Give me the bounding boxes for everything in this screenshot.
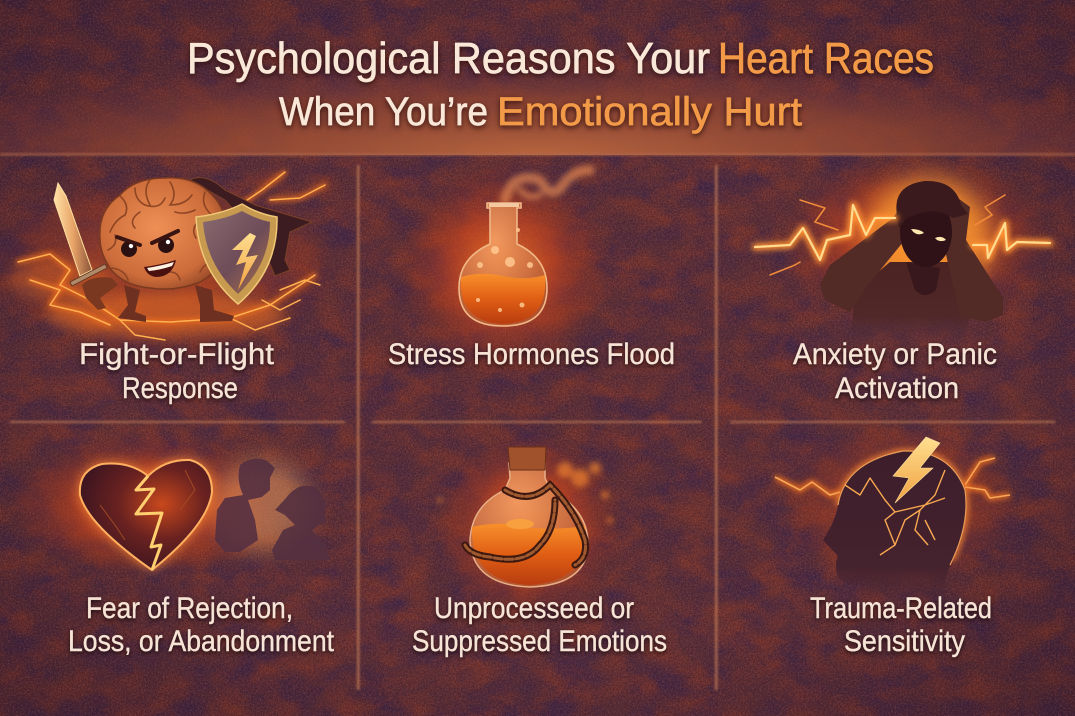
label: Unprocesseed or (434, 592, 634, 625)
lightning around brain (18, 172, 325, 340)
label: Sensitivity (844, 625, 965, 658)
label: Stress Hormones Flood (388, 338, 675, 371)
icon: sword (54, 183, 118, 310)
icon: head silhouette (823, 451, 966, 600)
icon: flask (459, 203, 547, 326)
icon: lightning bolt (893, 437, 940, 503)
icon: shield (196, 204, 277, 304)
label: Trauma-Related (810, 592, 992, 625)
label: Fight-or-Flight (79, 338, 275, 371)
icon: couple silhouette (215, 459, 330, 560)
panel: unprocessed emotions (360, 424, 715, 694)
label: Anxiety or Panic (793, 338, 997, 371)
title: Psychological Reasons Your (187, 34, 710, 83)
title: Emotionally Hurt (497, 90, 802, 134)
icon: person silhouette (820, 181, 1003, 345)
panel: fear of rejection (0, 424, 357, 694)
panel: trauma sensitivity (718, 424, 1075, 694)
title: Heart Races (718, 34, 934, 83)
icon: broken heart (80, 460, 212, 570)
label (412, 592, 667, 658)
panel: anxiety (718, 155, 1075, 420)
label: Fear of Rejection, (86, 592, 293, 625)
title band (0, 0, 1075, 156)
title (187, 34, 934, 134)
brain face (117, 231, 178, 277)
icon: cape (190, 178, 312, 276)
head cracks (845, 470, 945, 555)
label: Suppressed Emotions (412, 625, 667, 658)
icon: chain (465, 485, 586, 565)
label: Activation (835, 372, 959, 405)
cork (508, 447, 546, 470)
label (79, 338, 275, 405)
smoke (505, 170, 590, 200)
label (810, 592, 992, 658)
icon: brain (100, 178, 226, 289)
icon: bottle (470, 447, 588, 587)
icon: glowing eyes (911, 229, 946, 241)
smoke and sparks (437, 462, 613, 523)
panel: fight-or-flight (0, 156, 357, 420)
panel: stress hormones (360, 156, 715, 420)
icon: brain legs (118, 285, 234, 322)
label (793, 338, 997, 405)
label: Loss, or Abandonment (68, 625, 335, 658)
icon: heartbeat lines (755, 195, 1050, 275)
label: Response (122, 372, 238, 405)
label (68, 592, 335, 658)
title: When You’re (279, 90, 488, 134)
icon: side lightning (775, 458, 1010, 498)
